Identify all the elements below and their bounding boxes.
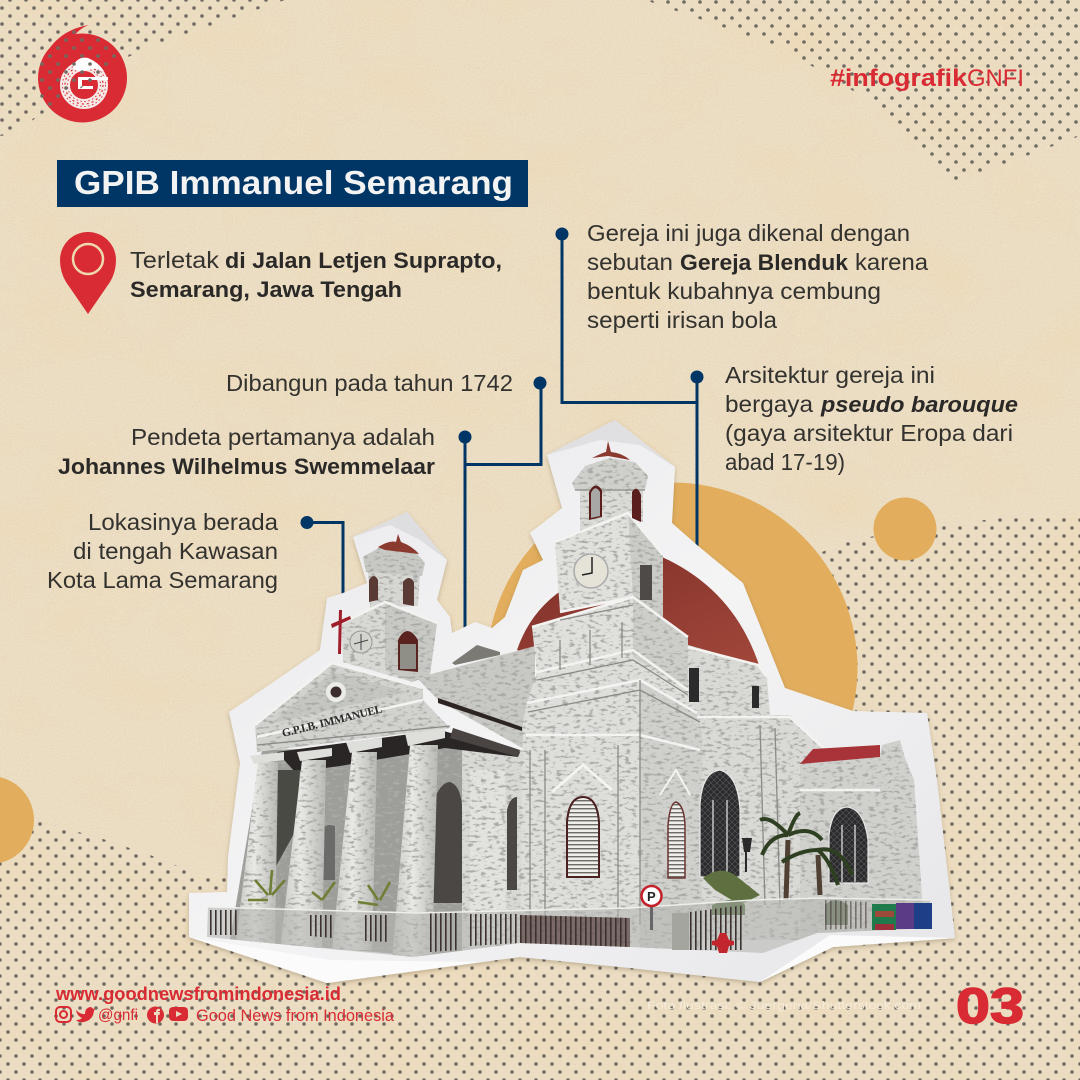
footer: website and social handles: Good News from Indonesia bbox=[196, 1006, 395, 1025]
top turret cap bbox=[592, 441, 630, 460]
text: architecture style: abad 17-19) bbox=[725, 449, 845, 475]
palm trees bbox=[703, 813, 852, 925]
hashtag: GNFI bbox=[967, 65, 1024, 92]
text: location in Kota Lama: Kota Lama Semarang bbox=[47, 567, 278, 593]
tower windows bbox=[369, 485, 759, 708]
text: Gereja Blenduk note: karena bbox=[855, 249, 928, 275]
electrical box bbox=[672, 913, 689, 950]
text: architecture style: (gaya arsitektur Eropa dari bbox=[725, 420, 1013, 446]
text: Gereja Blenduk note: Gereja ini juga dikenal dengan bbox=[587, 220, 910, 246]
text: Gereja Blenduk note: bentuk kubahnya cembung bbox=[587, 278, 881, 304]
cornices bbox=[255, 513, 880, 790]
text: built year: Dibangun pada tahun 1742 bbox=[226, 370, 513, 396]
portico arch door bbox=[432, 782, 462, 903]
page number: 03 bbox=[956, 978, 1024, 1034]
dotted halftone: top right bbox=[645, 0, 1080, 182]
hashtag bbox=[830, 65, 1024, 92]
text: location in Kota Lama bbox=[47, 509, 278, 593]
arched louvered windows bbox=[552, 765, 690, 878]
text: architecture style: bergaya bbox=[725, 391, 813, 417]
leader lines bbox=[302, 229, 702, 630]
text: Gereja Blenduk note: seperti irisan bola bbox=[587, 307, 777, 333]
text: location: di Jalan Letjen Suprapto, bbox=[225, 248, 502, 273]
paper cutout behind church bbox=[189, 420, 955, 983]
clocks bbox=[350, 554, 608, 653]
icon: youtube bbox=[169, 1007, 188, 1021]
dotted halftone: bottom bbox=[0, 515, 1080, 1080]
no-parking sign: P bbox=[647, 889, 656, 904]
text: Gereja Blenduk note: sebutan bbox=[587, 249, 673, 275]
text: location bbox=[130, 247, 502, 302]
icon: instagram bbox=[56, 1007, 71, 1022]
icon: location pin bbox=[60, 232, 116, 314]
red hydrant bbox=[712, 933, 734, 953]
text: Gereja Blenduk note bbox=[587, 220, 928, 333]
hashtag: #infografik bbox=[830, 65, 968, 92]
footer: website and social handles: www.goodnewsfromindonesia.id bbox=[55, 984, 341, 1004]
dome bbox=[517, 557, 760, 668]
pediment lettering: G.P.I.B. IMMANUEL bbox=[281, 703, 384, 740]
icon: facebook bbox=[147, 1006, 164, 1024]
colored signboards bbox=[872, 903, 932, 930]
red cross bbox=[331, 610, 351, 654]
text: Gereja Blenduk note: Gereja Blenduk bbox=[680, 250, 848, 275]
title banner bbox=[57, 160, 528, 207]
wing red roof bbox=[800, 745, 880, 764]
church building bbox=[207, 441, 932, 960]
portico plants bbox=[248, 870, 390, 905]
lamp bbox=[742, 838, 752, 872]
icon: twitter bbox=[76, 1007, 95, 1022]
ochre circle: large behind dome bbox=[486, 482, 858, 854]
text: location in Kota Lama: di tengah Kawasan bbox=[73, 538, 278, 564]
title banner: GPIB Immanuel Semarang bbox=[74, 164, 513, 201]
pediment oculus bbox=[326, 682, 346, 702]
small roof vent bbox=[452, 645, 500, 665]
logo: GNFI red swirl bbox=[38, 25, 127, 122]
dotted halftone: top left bbox=[0, 0, 285, 136]
text: location in Kota Lama: Lokasinya berada bbox=[88, 509, 278, 535]
walls, towers and pediment bbox=[230, 458, 925, 960]
photo credit: Foto Ilustrasi: © Juergena/Shutterstock.com bbox=[647, 1000, 921, 1012]
ochre circle: small right bbox=[874, 498, 936, 560]
text: first pastor bbox=[58, 424, 435, 479]
text: first pastor: Johannes Wilhelmus Swemmelaar bbox=[58, 454, 435, 479]
no-parking sign bbox=[642, 886, 662, 930]
columns bbox=[235, 745, 506, 960]
left turret cap bbox=[378, 534, 419, 554]
text: location: Terletak bbox=[130, 247, 220, 273]
text: architecture style: pseudo barouque bbox=[820, 392, 1018, 417]
ochre circle: left edge bbox=[0, 776, 34, 864]
text: first pastor: Pendeta pertamanya adalah bbox=[131, 424, 435, 450]
text: architecture style: Arsitektur gereja ini bbox=[725, 362, 935, 388]
text: location: Semarang, Jawa Tengah bbox=[130, 277, 402, 302]
large glass windows bbox=[700, 770, 868, 883]
portico ceiling bbox=[277, 730, 520, 772]
column capitals bbox=[250, 729, 445, 764]
roof shadow line bbox=[438, 698, 522, 731]
footer: website and social handles bbox=[55, 984, 395, 1025]
footer: website and social handles: @gnfi bbox=[98, 1007, 138, 1024]
fence bbox=[207, 898, 932, 957]
text: architecture style bbox=[725, 362, 1018, 475]
